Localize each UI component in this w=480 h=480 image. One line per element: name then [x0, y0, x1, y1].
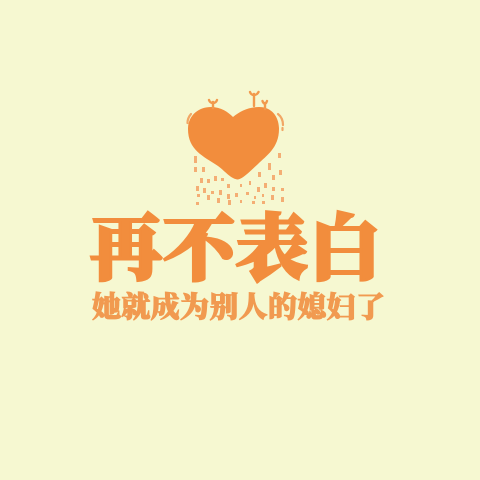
- subtitle: 她就成为别人的媳妇了: [92, 291, 385, 324]
- sprouts: [209, 92, 267, 109]
- icon: raining heart with sprouts: [188, 92, 284, 205]
- rain dots: [194, 153, 284, 205]
- heart: [188, 107, 279, 180]
- side marks: [188, 114, 283, 130]
- title: 再不表白: [90, 210, 381, 290]
